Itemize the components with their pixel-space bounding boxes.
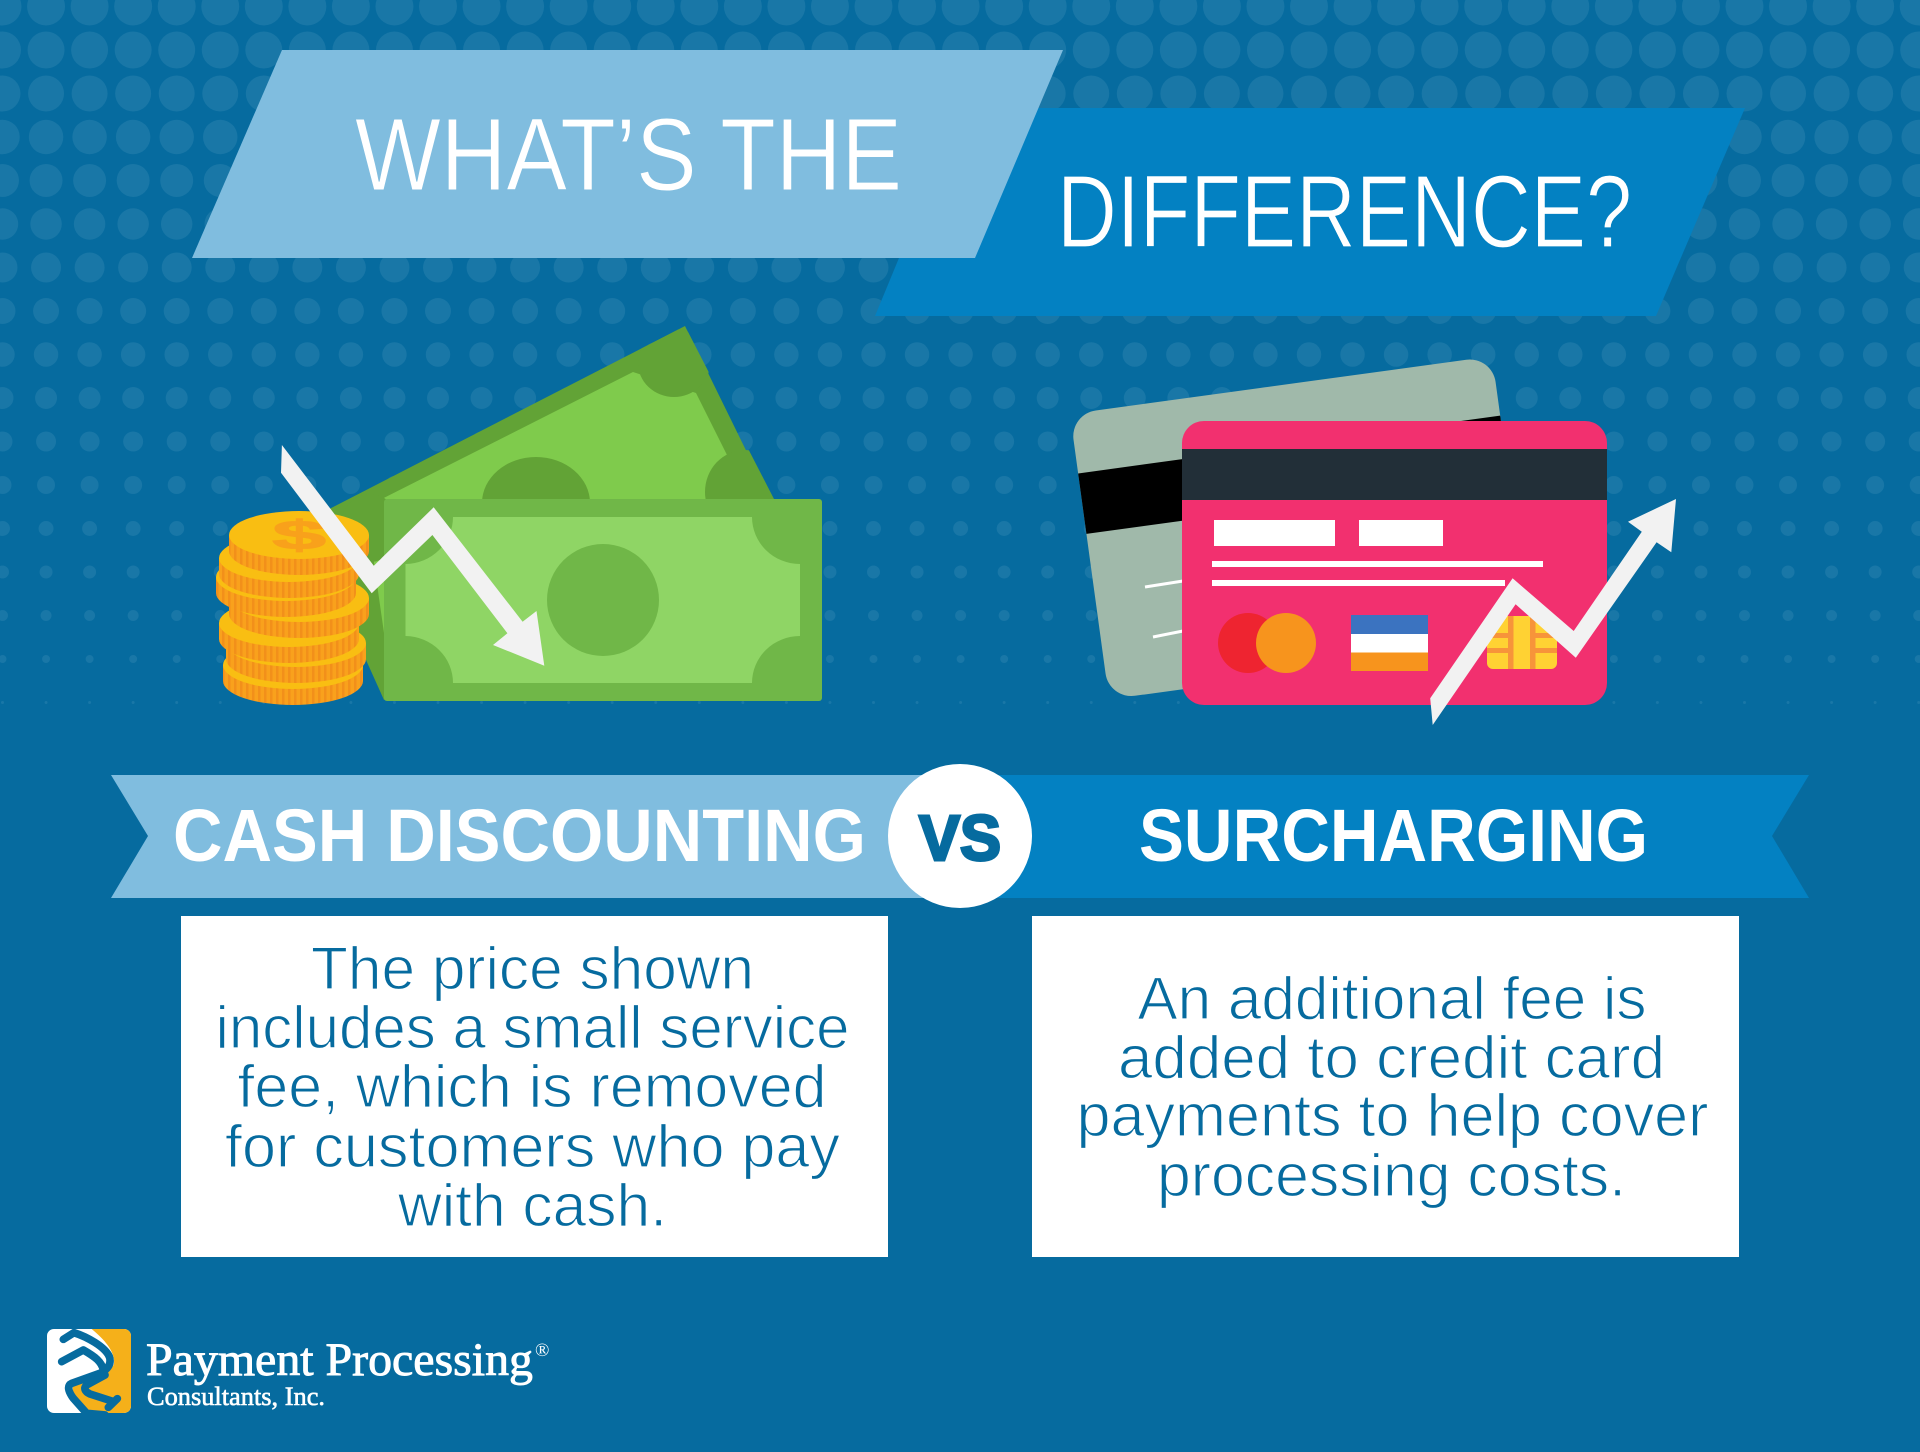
panel: surcharging description: added to credit card — [1118, 1024, 1665, 1091]
illustration: cash and coins — [216, 326, 822, 705]
panel: surcharging description: processing costs. — [1157, 1142, 1626, 1209]
background dot pattern — [2, 6, 1920, 702]
panel: cash discounting description: fee, which is removed — [238, 1053, 826, 1120]
vs badge — [888, 764, 1032, 908]
back bill — [304, 326, 790, 700]
illustration: credit cards — [1070, 356, 1676, 725]
back card — [1070, 356, 1531, 699]
panel: surcharging description — [1032, 916, 1739, 1257]
panel: cash discounting description: includes a small service — [216, 994, 850, 1061]
panel: cash discounting description: The price shown — [311, 935, 754, 1002]
arrow: downward trend — [281, 445, 544, 666]
title banner: difference: DIFFERENCE? — [1057, 154, 1632, 269]
panel: cash discounting description: with cash. — [397, 1172, 667, 1239]
front card — [1182, 421, 1607, 705]
title banner: what's the — [192, 50, 1063, 258]
logo wordmark — [146, 1334, 549, 1411]
logo wordmark: ® — [535, 1340, 549, 1361]
ribbon: surcharging — [961, 775, 1809, 898]
coin stack: $ — [272, 512, 326, 558]
title banner: what's the: WHAT’S THE — [355, 97, 902, 212]
ribbon: cash discounting: CASH DISCOUNTING — [173, 794, 866, 877]
logo wordmark: Consultants, Inc. — [147, 1382, 325, 1411]
icon: logo mark — [47, 1329, 132, 1415]
panel: cash discounting description — [181, 916, 888, 1257]
ribbon: cash discounting — [111, 775, 961, 898]
ribbon: surcharging: SURCHARGING — [1139, 794, 1648, 877]
front bill — [384, 499, 822, 701]
arrow: upward trend — [1430, 499, 1676, 725]
panel: surcharging description: An additional fee is — [1138, 965, 1646, 1032]
panel: cash discounting description: for customers who pay — [225, 1113, 840, 1180]
logo — [47, 1329, 549, 1415]
logo wordmark: Payment Processing — [146, 1334, 533, 1386]
panel: surcharging description: payments to help cover — [1076, 1082, 1708, 1149]
vs badge: VS — [919, 802, 1001, 874]
coin stack — [216, 511, 369, 705]
title banner: difference — [875, 108, 1745, 316]
